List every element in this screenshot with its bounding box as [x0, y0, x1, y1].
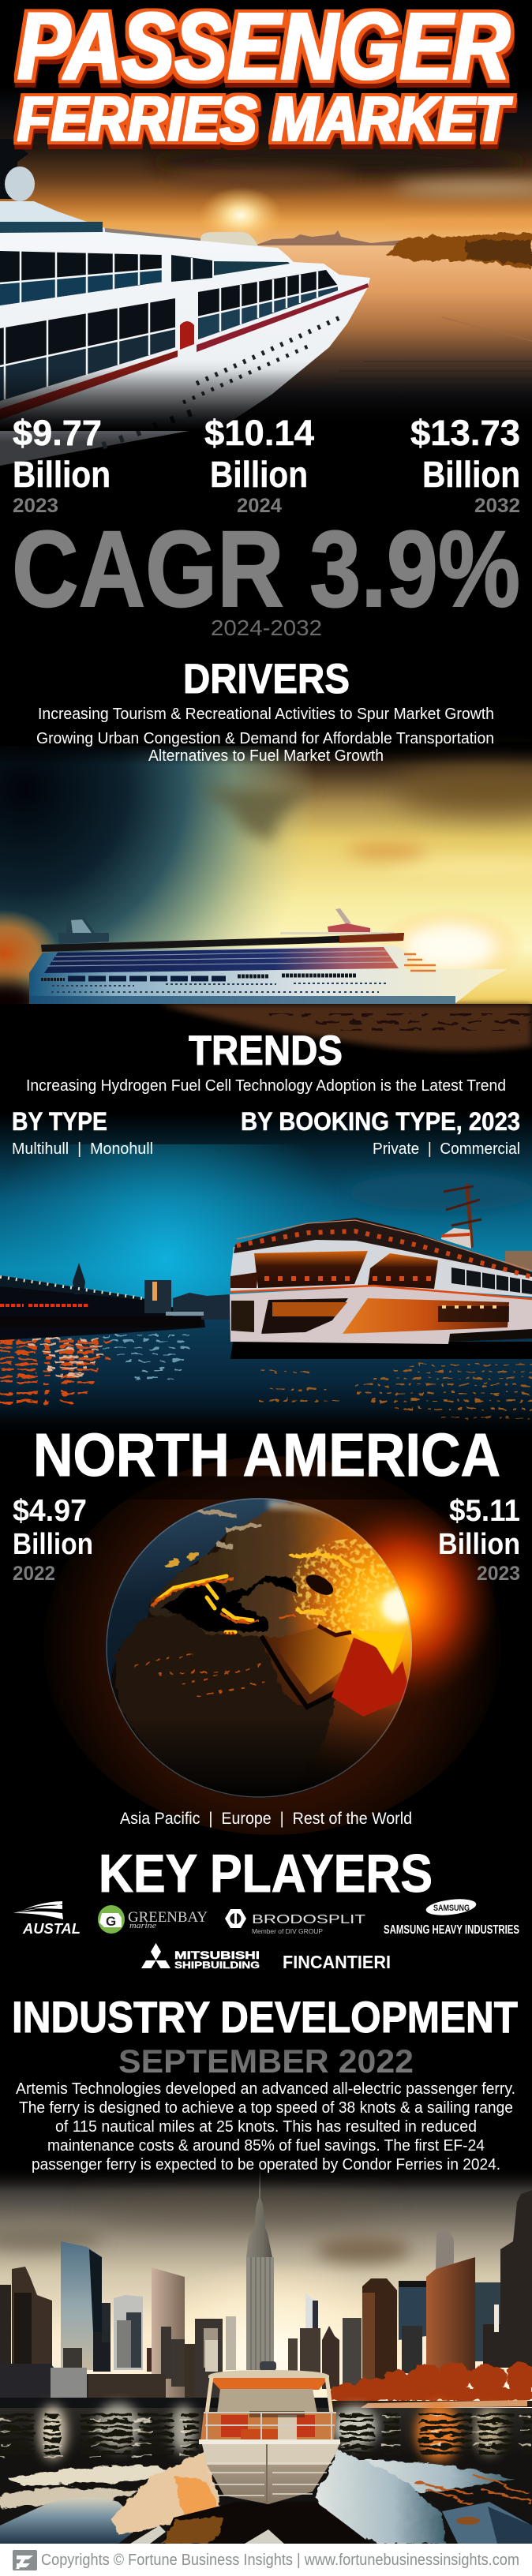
industry development paragraph: maintenance costs & around 85% of fuel savings. The first EF-24	[47, 2137, 485, 2155]
other regions: Asia Pacific | Europe | Rest of the World	[120, 1810, 412, 1828]
industry development paragraph: The ferry is designed to achieve a top speed of 38 knots & a sailing range	[19, 2099, 513, 2117]
drivers text: Alternatives to Fuel Market Growth	[148, 747, 384, 765]
logo: Austal	[13, 1901, 81, 1937]
left bank pier and city	[0, 1263, 230, 1340]
logo: Samsung Heavy Industries	[384, 1896, 519, 1937]
drivers heading: DRIVERS	[183, 656, 350, 702]
trends heading: TRENDS	[189, 1028, 343, 1074]
logo: Greenbay Marine	[98, 1905, 208, 1934]
stat: North America 2022: $4.97	[13, 1494, 87, 1528]
red door	[180, 321, 194, 350]
logo: Brodosplit: BRODOSPLIT	[252, 1913, 365, 1926]
bottom centre water	[162, 2502, 371, 2544]
wooded island	[387, 234, 532, 269]
water and wake	[0, 2361, 532, 2544]
autumn trees	[330, 2361, 532, 2402]
portholes	[103, 316, 344, 446]
stat: North America 2022: 2022	[13, 1563, 55, 1585]
logo: Brodosplit	[225, 1909, 365, 1935]
stat: 2024 market size: 2024	[237, 495, 282, 517]
segment: by booking type: Private | Commercial	[373, 1140, 520, 1158]
boat	[199, 2361, 340, 2504]
cruise ship	[29, 908, 508, 1004]
stat: 2023 market size: Billion	[13, 454, 111, 495]
red stripe	[0, 283, 369, 420]
distant skyline	[254, 230, 404, 245]
industry development paragraph: of 115 nautical miles at 25 knots. This has resulted in reduced	[55, 2118, 477, 2136]
India	[347, 1628, 404, 1673]
logo: Fincantieri: FINCANTIERI	[283, 1952, 391, 1972]
swells	[0, 2460, 513, 2508]
dark ripples over shimmer	[0, 2415, 532, 2453]
stat: North America 2022: Billion	[13, 1528, 93, 1561]
panel: city and boat scene	[0, 2166, 532, 2544]
skyline right	[288, 2190, 532, 2409]
northern land	[148, 1503, 392, 1638]
icon: Fortune Business Insights logo	[13, 2550, 37, 2570]
logo: Brodosplit: Member of DIV GROUP	[252, 1928, 323, 1935]
stat: North America 2023	[438, 1494, 520, 1585]
skyline left	[0, 2241, 236, 2401]
funnel silhouette	[0, 139, 28, 199]
Africa	[114, 1613, 336, 1765]
drivers text: Growing Urban Congestion & Demand for Affordable Transportation	[36, 730, 494, 747]
industry development paragraph	[16, 2080, 515, 2174]
panel: cruise ship sunset scene	[0, 742, 532, 1056]
stat: 2032 market size: 2032	[474, 495, 520, 517]
drivers text: Increasing Tourism & Recreational Activities to Spur Market Growth	[38, 706, 494, 723]
stat: 2023 market size	[13, 413, 111, 517]
Mediterranean and Black Sea	[158, 1576, 298, 1631]
footer	[0, 2544, 532, 2576]
logo: Mitsubishi Shipbuilding: SHIPBUILDING	[174, 1960, 260, 1971]
Arabia	[274, 1627, 354, 1694]
Caspian Sea	[306, 1574, 333, 1595]
industry development paragraph: passenger ferry is expected to be operated by Condor Ferries in 2024.	[32, 2156, 500, 2174]
stat: 2023 market size: $9.77	[13, 413, 102, 453]
key players heading: KEY PLAYERS	[99, 1844, 433, 1904]
sea	[0, 1004, 532, 1056]
right wake	[316, 2451, 446, 2544]
segment: by type: Multihull | Monohull	[12, 1140, 153, 1158]
stat: North America 2022	[13, 1494, 93, 1585]
stat: 2024 market size: Billion	[210, 454, 308, 495]
Europe lights	[158, 1576, 253, 1632]
logo: Greenbay Marine: G	[106, 1914, 116, 1929]
date heading: SEPTEMBER 2022	[118, 2042, 414, 2080]
stat: 2024 market size: $10.14	[204, 413, 314, 453]
ferry	[230, 1184, 532, 1359]
stat: 2024 market size	[204, 413, 314, 517]
left wake	[112, 2451, 221, 2535]
Arabian Sea	[332, 1638, 410, 1717]
stat: 2032 market size: $13.73	[410, 413, 520, 453]
water reflections	[0, 1335, 532, 1417]
segment: by type: BY TYPE	[12, 1107, 107, 1136]
CAGR figure: 2024-2032	[211, 616, 322, 640]
logo: Samsung Heavy Industries: SAMSUNG	[433, 1904, 470, 1913]
trends text: Increasing Hydrogen Fuel Cell Technology Adoption is the Latest Trend	[26, 1077, 506, 1095]
industry development paragraph: Artemis Technologies developed an advanced all-electric passenger ferry.	[16, 2080, 515, 2098]
ship hull and decks	[0, 232, 370, 466]
ocean	[106, 1498, 287, 1681]
Empire State tower	[246, 2170, 274, 2370]
shimmer columns	[39, 2403, 503, 2461]
drivers text	[36, 706, 494, 765]
logo: Greenbay Marine: marine	[129, 1922, 157, 1930]
stat: North America 2023: $5.11	[449, 1494, 520, 1528]
segment: by booking type	[241, 1107, 520, 1158]
title	[17, 0, 512, 154]
segment: by type	[12, 1107, 153, 1158]
Red Sea	[261, 1636, 339, 1707]
radar dome	[5, 167, 35, 201]
logo: Austal: AUSTAL	[22, 1921, 81, 1937]
stat: 2032 market size: Billion	[422, 454, 520, 495]
stat: 2032 market size	[410, 413, 520, 517]
ship top cabin	[0, 201, 105, 233]
stat: 2023 market size: 2023	[13, 495, 58, 517]
panel: harbour ferry night scene	[0, 1113, 532, 1440]
logo: Mitsubishi Shipbuilding: MITSUBISHI	[174, 1949, 260, 1961]
panel: globe	[51, 1456, 496, 1835]
logo: Greenbay Marine: GREENBAY	[128, 1909, 208, 1926]
lower deck	[230, 1286, 532, 1344]
lower windows	[0, 270, 338, 401]
upper deck	[230, 1231, 532, 1297]
logo: Mitsubishi Shipbuilding	[141, 1943, 260, 1971]
upper windows	[0, 251, 290, 305]
stat: North America 2023: Billion	[438, 1528, 520, 1561]
stat: North America 2023: 2023	[477, 1563, 520, 1585]
panel: hero sunset ship scene	[0, 87, 532, 466]
Persian Gulf	[318, 1626, 351, 1635]
